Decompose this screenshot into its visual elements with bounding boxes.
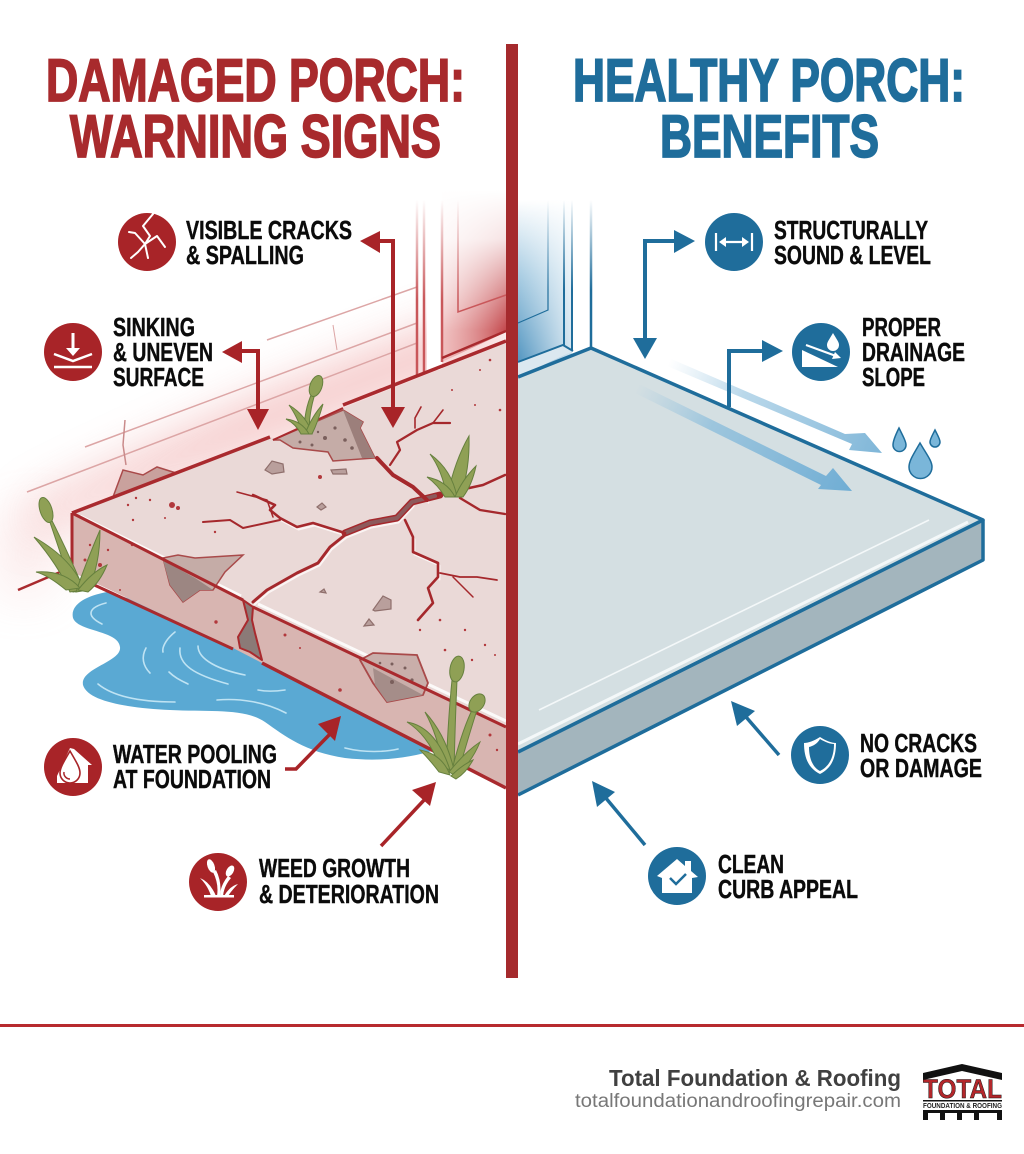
arrow [360, 231, 405, 428]
porch edge outlines [18, 341, 506, 788]
label: WATER POOLING [113, 739, 277, 769]
porch top surface [518, 348, 983, 750]
arrow [729, 340, 783, 407]
callout: structurally sound and level [633, 213, 931, 359]
label: SINKING [113, 312, 195, 342]
label: SURFACE [113, 362, 204, 392]
icon: weeds [189, 853, 247, 911]
label: VISIBLE CRACKS [186, 215, 352, 245]
label [774, 215, 931, 270]
arrow [285, 716, 341, 769]
label: NO CRACKS [860, 728, 977, 758]
panel: damaged porch illustration [0, 180, 506, 788]
weed: back edge [286, 374, 325, 434]
logo: FOUNDATION & ROOFING [923, 1103, 1002, 1110]
panel: healthy porch illustration [518, 200, 983, 795]
arrow [222, 341, 269, 430]
foundation crack in side face [238, 600, 262, 660]
icon: sinking [44, 323, 102, 381]
surface cracks [203, 407, 505, 620]
title: healthy porch [573, 47, 965, 170]
footer brand text [575, 1065, 901, 1112]
label: WEED GROWTH [259, 853, 410, 883]
label: PROPER [862, 312, 941, 342]
title: damaged porch: DAMAGED PORCH: [46, 47, 465, 114]
water drops [893, 428, 940, 478]
arrow [731, 701, 779, 755]
icon: slope and drop [792, 323, 850, 381]
porch side face [72, 513, 506, 788]
weed: front corner [407, 655, 488, 779]
crack highlights [254, 478, 440, 606]
icon: house check [648, 847, 706, 905]
red wall wash [0, 180, 506, 600]
label [718, 849, 858, 904]
door and frame [518, 200, 591, 377]
label: & UNEVEN [113, 337, 213, 367]
footer brand text: totalfoundationandroofingrepair.com [575, 1091, 901, 1112]
title: damaged porch [46, 47, 465, 170]
porch top surface [72, 343, 506, 727]
door and frame [417, 200, 506, 376]
title: damaged porch: WARNING SIGNS [70, 103, 441, 170]
porch side face [518, 520, 983, 795]
logo [923, 1064, 1002, 1120]
title: healthy porch: BENEFITS [660, 103, 879, 170]
callout: visible cracks and spalling [118, 213, 405, 428]
label [259, 853, 439, 909]
label: OR DAMAGE [860, 753, 982, 783]
icon: water house [44, 738, 102, 796]
label: SLOPE [862, 362, 925, 392]
label [113, 312, 213, 392]
spalled patch: back edge [273, 410, 375, 461]
icon: shield [791, 726, 849, 784]
footer rule [0, 1024, 1024, 1027]
icon: level span [705, 213, 763, 271]
arrow [381, 782, 436, 846]
arrow [592, 781, 645, 845]
label [186, 215, 352, 270]
footer brand text: Total Foundation & Roofing [609, 1065, 901, 1091]
callout: clean curb appeal [592, 781, 858, 905]
label [862, 312, 965, 392]
label: DRAINAGE [862, 337, 965, 367]
puddle [73, 592, 435, 760]
label: STRUCTURALLY [774, 215, 928, 245]
arrow [633, 230, 695, 359]
surface chips and specks [265, 461, 391, 626]
logo: TOTAL [923, 1074, 1002, 1104]
callout: no cracks or damage [731, 701, 982, 784]
label: & DETERIORATION [259, 879, 439, 909]
red specks [84, 359, 501, 751]
label [113, 739, 277, 794]
surface highlights [518, 520, 968, 744]
icon: cracks [118, 213, 176, 271]
label: CLEAN [718, 849, 784, 879]
callout: weed growth and deterioration [189, 782, 439, 911]
weed: crack junction [427, 436, 476, 497]
label: CURB APPEAL [718, 874, 858, 904]
wall spall [113, 467, 176, 497]
spalled patch: side right [360, 653, 428, 702]
center divider [506, 44, 518, 978]
spalled patch: side left [163, 555, 243, 602]
drainage flow arrows [635, 358, 882, 491]
callout: sinking and uneven surface [44, 312, 269, 430]
top surface white edge highlight [80, 516, 506, 721]
callout: proper drainage slope [729, 312, 965, 407]
callout: water pooling at foundation [44, 716, 341, 796]
label: AT FOUNDATION [113, 764, 271, 794]
label [860, 728, 982, 783]
label: & SPALLING [186, 240, 304, 270]
wall siding lines [27, 287, 417, 492]
weed: left corner [34, 496, 107, 592]
porch edge outlines [518, 348, 983, 795]
label: SOUND & LEVEL [774, 240, 931, 270]
